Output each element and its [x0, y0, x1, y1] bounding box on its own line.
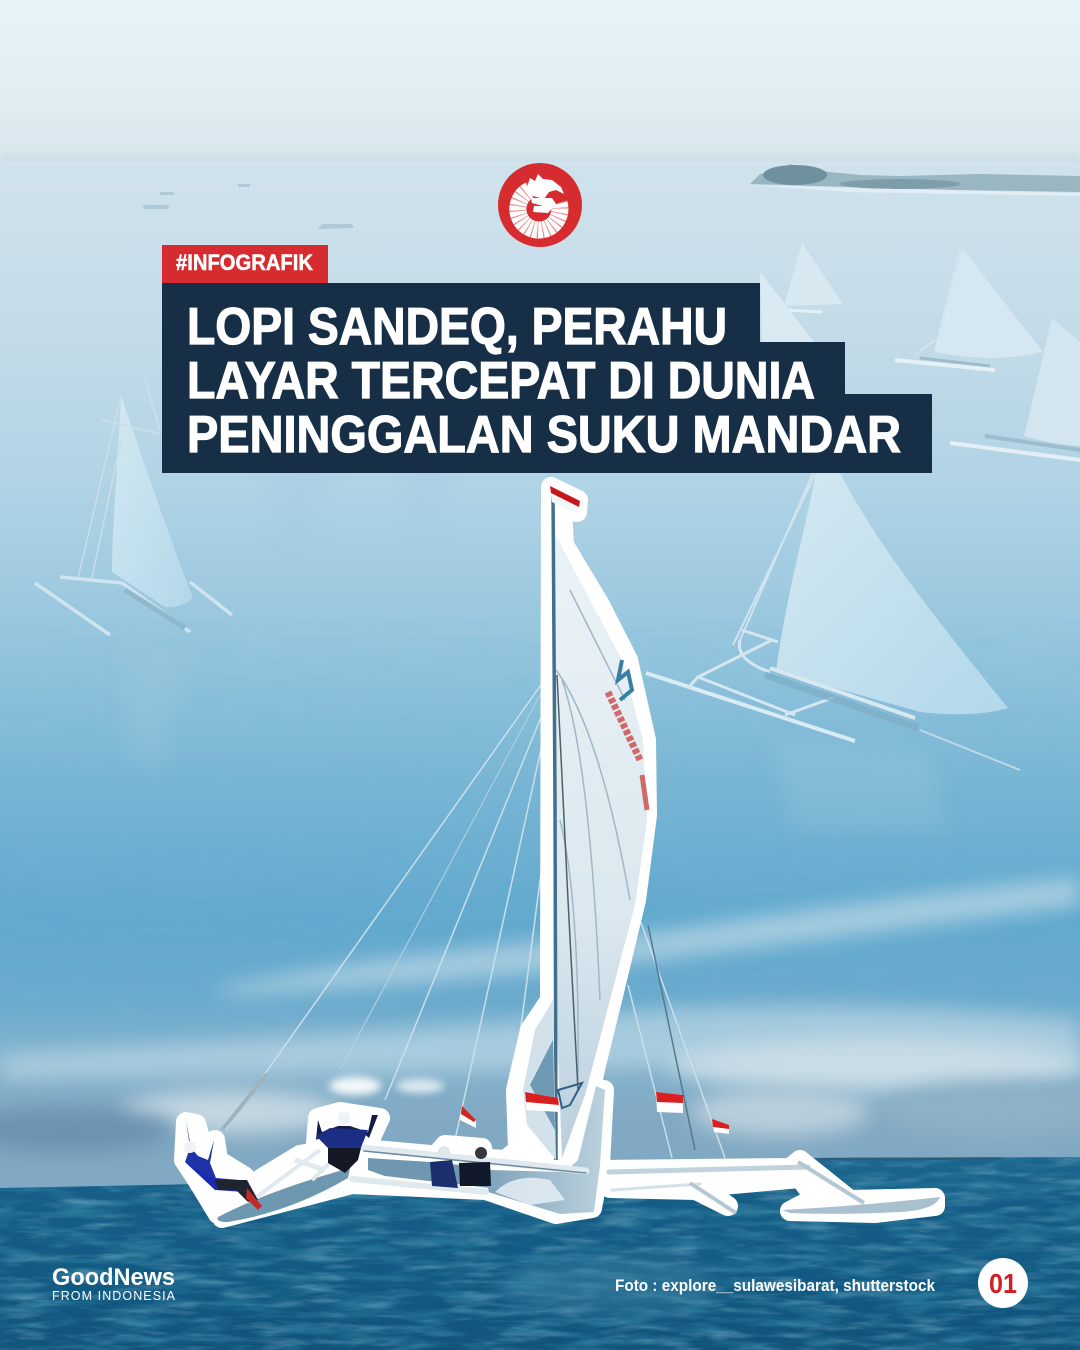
background boat: behind title [760, 272, 814, 342]
main hull and stern [488, 1086, 605, 1214]
background boat: upper right [895, 248, 1043, 370]
title block [162, 283, 932, 473]
page number badge: 01 [989, 1268, 1017, 1299]
cross beams [352, 1148, 808, 1192]
background boat: left [35, 380, 232, 635]
main boat white sticker outline [184, 487, 935, 1218]
brand: GoodNews from Indonesia: FROM INDONESIA [52, 1289, 176, 1303]
right outrigger float [690, 1162, 940, 1214]
photo credit: Foto : explore__sulawesibarat, shutterstock [615, 1276, 935, 1295]
tag: #INFOGRAFIK [162, 245, 328, 283]
main sail [553, 490, 647, 1160]
background boat: large right [646, 473, 1020, 770]
open sea foreground [0, 1150, 1080, 1350]
brand: GoodNews from Indonesia: GoodNews [52, 1264, 175, 1291]
small distant boats [143, 184, 354, 229]
page number badge [978, 1258, 1028, 1308]
background boat: right edge [950, 318, 1080, 460]
signal flags on rigging [460, 1092, 729, 1134]
title block: PENINGGALAN SUKU MANDAR [187, 406, 901, 464]
tag: #INFOGRAFIK: #INFOGRAFIK [176, 250, 313, 275]
clouds above the horizon [0, 1039, 1080, 1152]
soft cloud reflection bands [0, 878, 1080, 1080]
lower sail with Indonesian flag [523, 1000, 582, 1160]
main boat rigging lines [222, 675, 725, 1158]
crew member hiking on left [184, 1120, 262, 1210]
two crew members seated [430, 1146, 491, 1188]
distant island on horizon [748, 164, 1080, 196]
brand: GoodNews from Indonesia [52, 1264, 176, 1303]
crew member with raised arms [316, 1112, 378, 1173]
view through the boat between the beams [368, 1158, 490, 1188]
title block: LAYAR TERCEPAT DI DUNIA [187, 352, 815, 410]
faint sail reflections [120, 470, 950, 830]
masthead flag [550, 486, 580, 513]
background boat: far right top [784, 243, 843, 312]
left outrigger float [217, 1130, 364, 1222]
logo badge [498, 163, 582, 247]
title block: LOPI SANDEQ, PERAHU [187, 298, 727, 356]
